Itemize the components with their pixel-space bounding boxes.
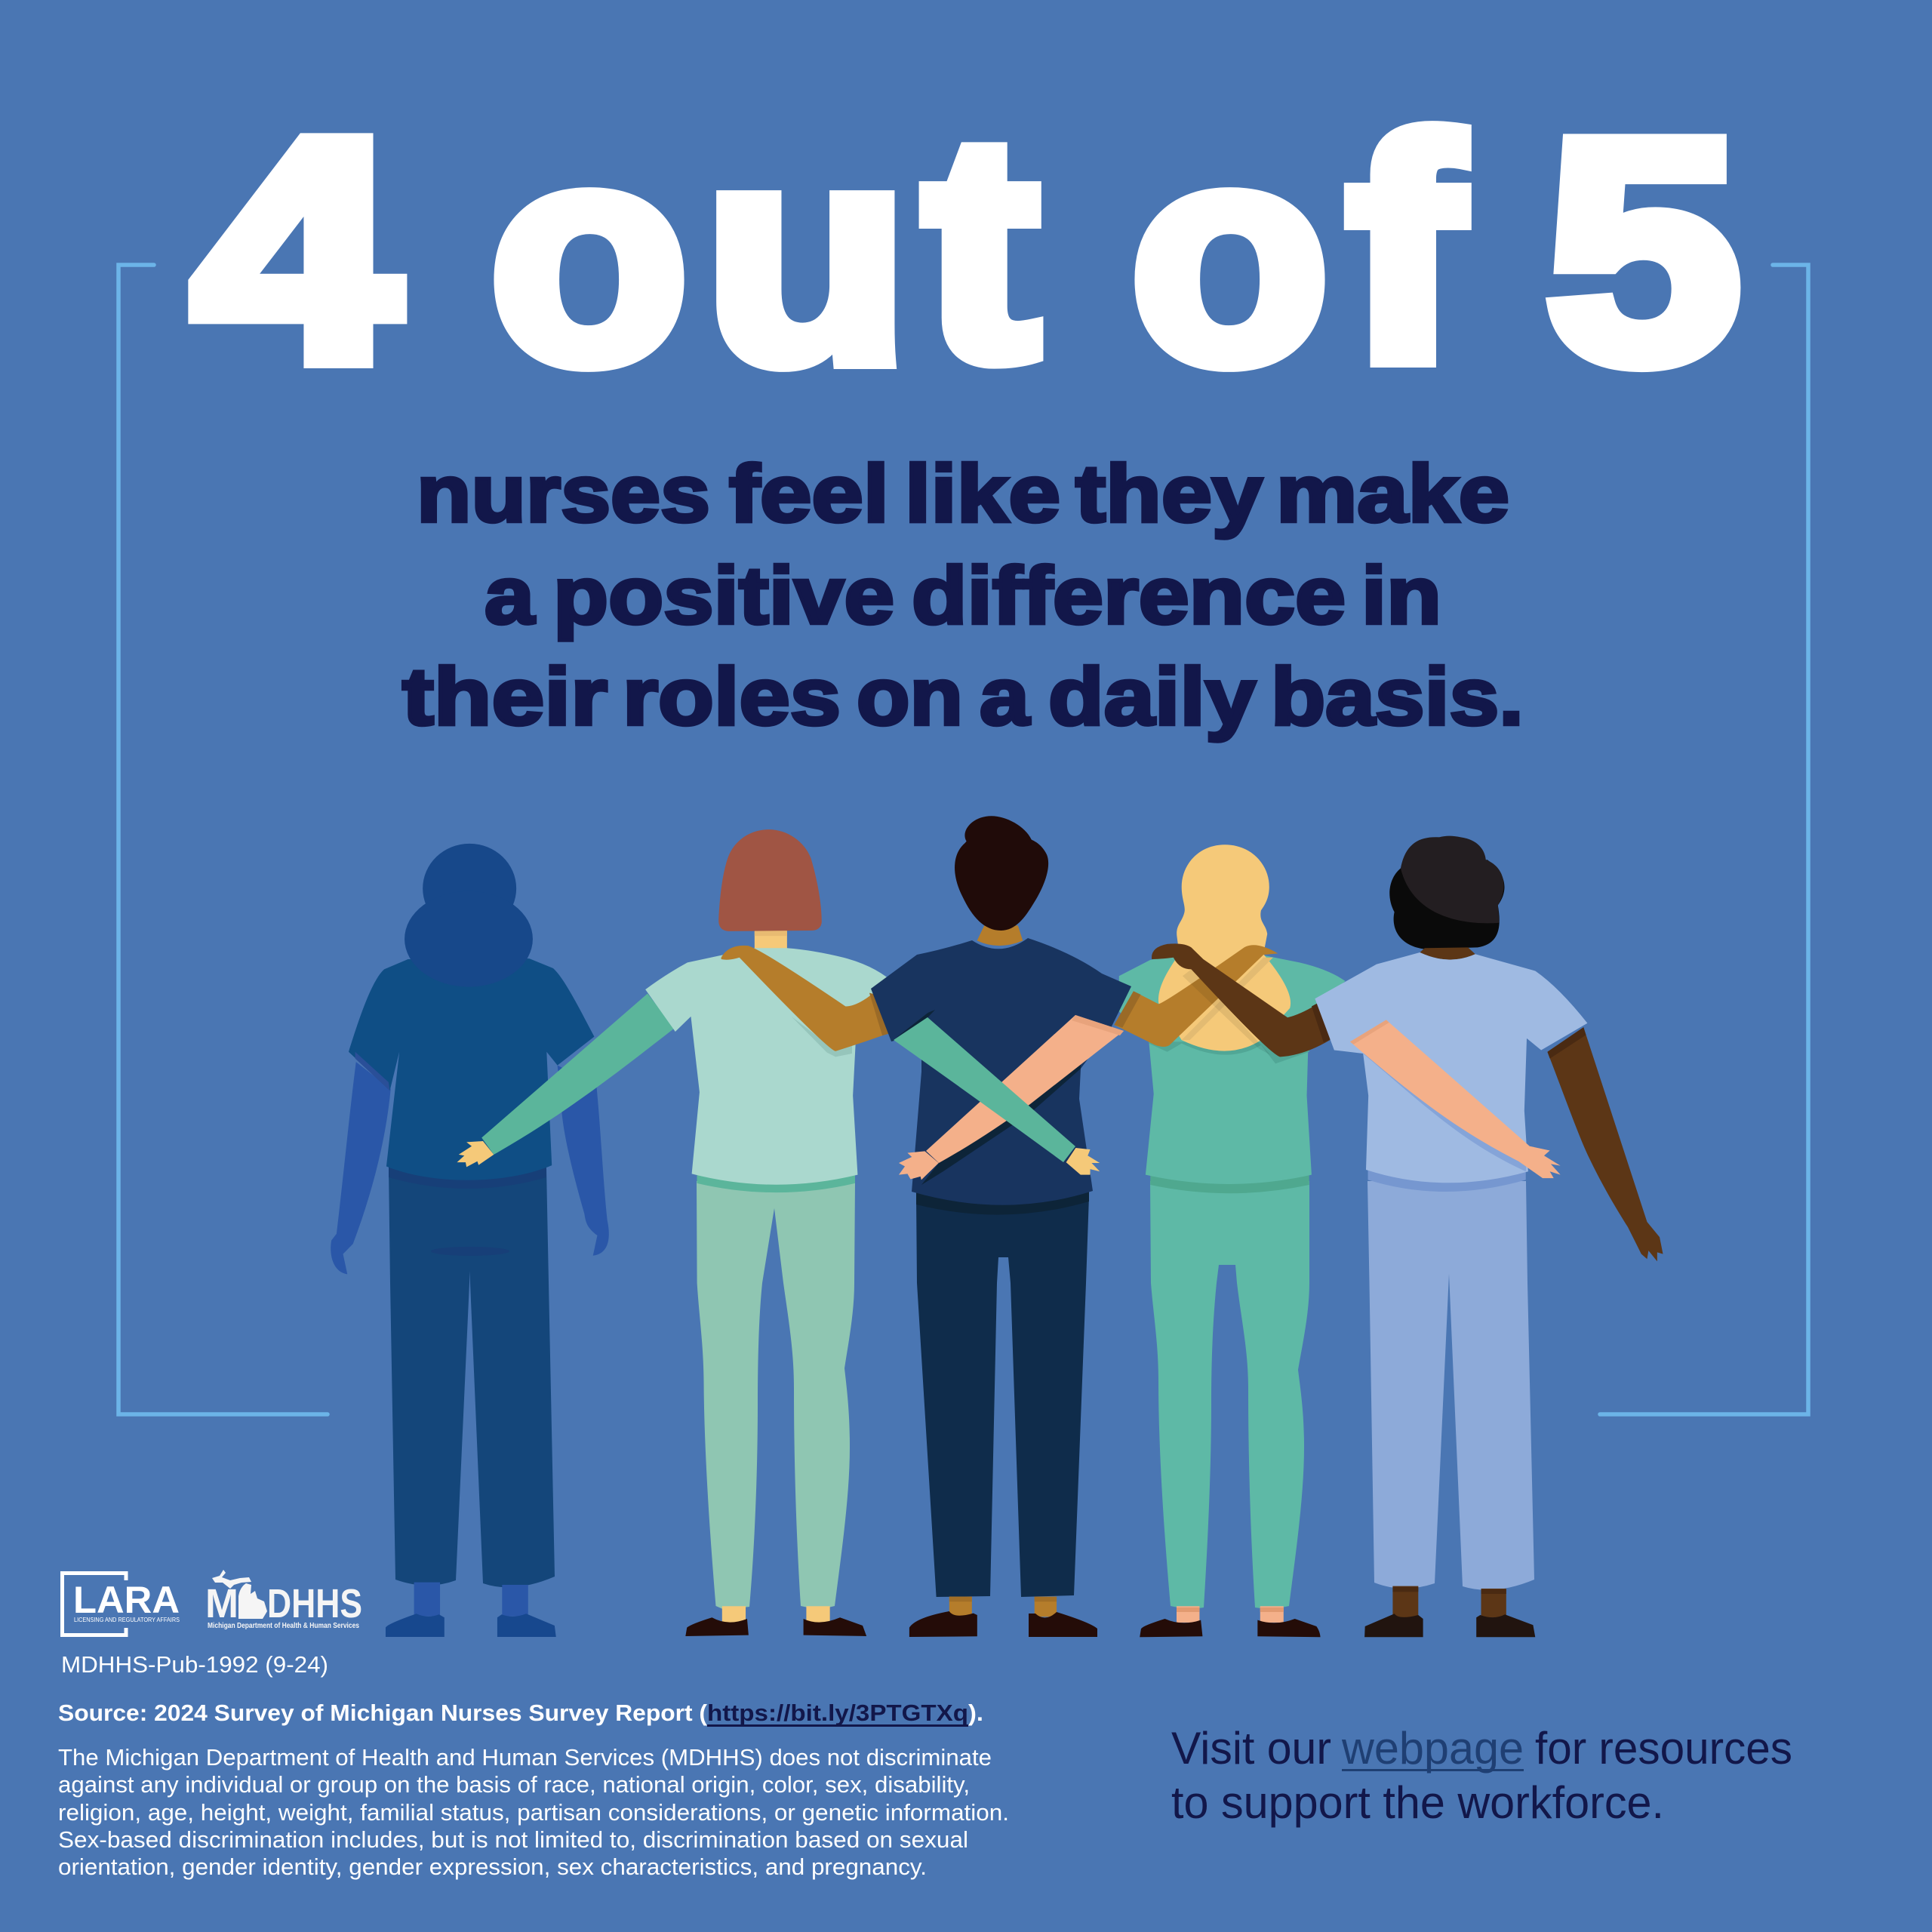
source line: Source: 2024 Survey of Michigan Nurses Survey Report ( — [58, 1700, 708, 1726]
subheading: on — [857, 651, 963, 742]
non-discrimination notice — [58, 1744, 1009, 1880]
subheading: positive — [553, 549, 894, 641]
crossed arms over nurse 4 — [1114, 943, 1331, 1057]
logo: MDHHS: Michigan Department of Health & Human Services — [208, 1622, 359, 1630]
call to action: Visit our — [1171, 1723, 1331, 1774]
subheading: roles — [623, 651, 841, 742]
logo: LARA: LARA — [73, 1579, 180, 1621]
logo: LARA: LICENSING AND REGULATORY AFFAIRS — [74, 1617, 180, 1623]
subheading: difference — [912, 549, 1346, 641]
logo: MDHHS — [205, 1570, 362, 1630]
publication number: MDHHS-Pub-1992 (9-24) — [61, 1651, 328, 1678]
subheading: basis. — [1271, 651, 1524, 742]
title: 4 out of 5: f — [1348, 73, 1465, 426]
logo: MDHHS: DHHS — [267, 1581, 362, 1626]
subheading: they — [1075, 448, 1263, 539]
subheading: make — [1276, 448, 1509, 539]
subheading: daily — [1048, 651, 1256, 742]
call to action: webpage — [1341, 1723, 1524, 1774]
non-discrimination notice: Sex-based discrimination includes, but is not limited to, discrimination based on sexual — [58, 1826, 968, 1853]
frame brackets — [118, 265, 1808, 1414]
subheading: in — [1361, 549, 1441, 641]
nurse 3: navy scrubs figure — [871, 816, 1131, 1637]
source line: https://bit.ly/3PTGTXq — [707, 1700, 968, 1726]
title: 4 out of 5: 4 — [193, 74, 401, 426]
source line: ). — [968, 1700, 983, 1726]
call to action — [1171, 1723, 1792, 1828]
source line — [58, 1700, 983, 1727]
subheading: feel — [729, 448, 889, 539]
arms crossed behind nurse 3 — [891, 1010, 1124, 1185]
nurse 1: silhouette figure — [331, 844, 609, 1637]
title: 4 out of 5 — [193, 72, 1740, 427]
nurse 2: mint scrubs figure — [457, 829, 887, 1636]
subheading: nurses — [417, 448, 710, 539]
title: 4 out of 5: o — [491, 85, 687, 425]
title: 4 out of 5: 5 — [1546, 75, 1740, 427]
title: 4 out of 5: t — [924, 72, 1038, 424]
nurse 3 arm resting on nurse 2 — [721, 946, 890, 1051]
call to action: for resources — [1535, 1723, 1792, 1774]
subheading — [402, 448, 1524, 742]
title: 4 out of 5: u — [706, 85, 908, 425]
subheading: their — [402, 651, 608, 742]
non-discrimination notice: religion, age, height, weight, familial status, partisan considerations, or genetic information. — [58, 1799, 1009, 1826]
call to action: to support the workforce. — [1171, 1777, 1664, 1828]
title: 4 out of 5: o — [1132, 85, 1328, 425]
subheading: a — [485, 549, 535, 641]
subheading: like — [905, 448, 1060, 539]
nurse 4: teal scrubs figure — [1119, 844, 1346, 1637]
non-discrimination notice: The Michigan Department of Health and Human Services (MDHHS) does not discriminate — [58, 1744, 992, 1770]
logo: LARA — [62, 1573, 180, 1635]
non-discrimination notice: orientation, gender identity, gender expression, sex characteristics, and pregnancy. — [58, 1854, 927, 1880]
non-discrimination notice: against any individual or group on the basis of race, national origin, color, sex, disability, — [58, 1771, 970, 1798]
logo: MDHHS: M — [205, 1581, 238, 1626]
subheading: a — [980, 651, 1030, 742]
nurse 5: light blue scrubs figure — [1315, 836, 1663, 1637]
